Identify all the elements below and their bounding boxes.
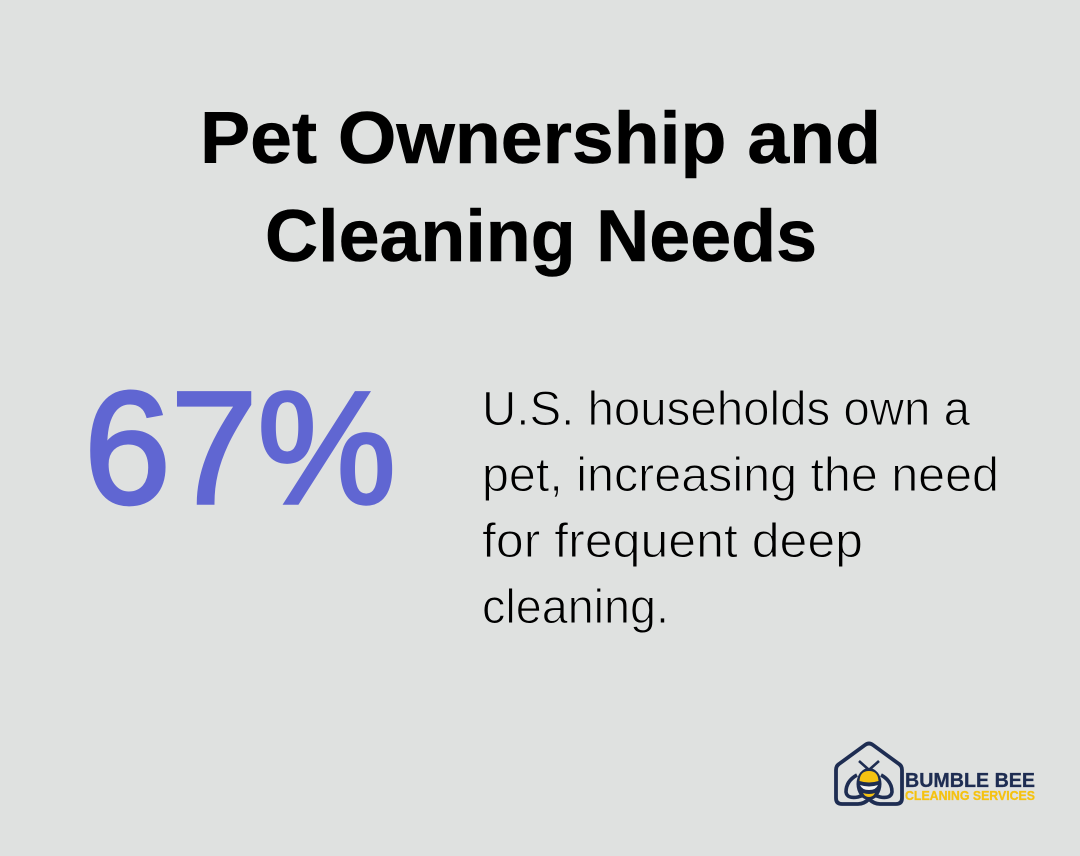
statistic: 67%: 67% bbox=[84, 358, 396, 537]
description text bbox=[482, 383, 999, 634]
description text: cleaning. bbox=[482, 581, 669, 634]
icon: house outline with bee bbox=[836, 744, 902, 804]
title bbox=[200, 98, 881, 277]
description text: pet, increasing the need bbox=[482, 449, 999, 502]
logo tagline: CLEANING SERVICES bbox=[905, 788, 1035, 803]
description text: for frequent deep bbox=[482, 515, 863, 568]
description text: U.S. households own a bbox=[482, 383, 970, 436]
logo: Bumble Bee Cleaning Services bbox=[836, 744, 1035, 804]
title: Pet Ownership and bbox=[200, 98, 881, 179]
title: Cleaning Needs bbox=[265, 196, 817, 277]
logo wordmark: BUMBLE BEE bbox=[905, 770, 1035, 792]
